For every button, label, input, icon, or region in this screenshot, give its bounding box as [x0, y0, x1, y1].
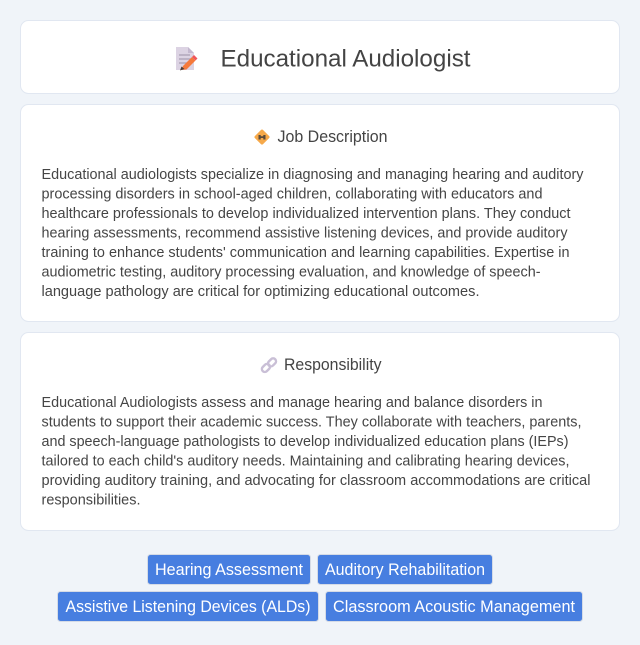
text block: responsibility: Educational Audiologists assess and manage hearing and balance disorders in [42, 395, 542, 411]
tag: assistive listening devices [58, 592, 318, 622]
heading: job description: Job Description [278, 128, 388, 146]
text block: responsibility: and speech-language pathologists to develop individualized education plans (IEPs) [42, 434, 568, 450]
tag: classroom acoustic management [326, 592, 582, 622]
text block: responsibility: providing auditory training, and advocating for classroom accommodations are critical [42, 473, 590, 489]
text block: responsibility [42, 395, 590, 508]
tag: classroom acoustic management: Classroom Acoustic Management [333, 598, 575, 616]
text block: job description: Educational audiologists specialize in diagnosing and managing hearing and auditory [42, 167, 584, 183]
panel: responsibility [20, 332, 620, 530]
title text: Educational Audiologist [220, 46, 471, 72]
icon: orange diamond [254, 129, 270, 145]
heading: responsibility: Responsibility [284, 356, 382, 374]
text block: job description [42, 167, 584, 300]
text block: responsibility: tailored to each child's auditory needs. Maintaining and calibrating hearing devices, [42, 454, 570, 470]
tag: hearing assessment [148, 554, 310, 584]
text block: job description: training to enhance students' communication and learning capabilities. Expertise in [42, 245, 570, 261]
panel: job description [20, 104, 620, 322]
tag: auditory rehabilitation [318, 554, 492, 584]
text block: job description: language pathology are critical for optimizing educational outcomes. [42, 284, 480, 300]
text block: responsibility: students to support their academic success. They collaborate with teachers, parents, [42, 414, 582, 430]
icon: link [261, 357, 277, 373]
text block: job description: processing disorders in school-aged children, collaborating with educators and [42, 186, 542, 202]
icon: memo with pencil [176, 47, 198, 70]
text block: job description: healthcare professionals to develop individualized intervention plans. They conduct [42, 206, 570, 222]
text block: job description: hearing assessments, recommend assistive listening devices, and provide auditory [42, 226, 568, 242]
panel: title [20, 20, 620, 94]
tag: auditory rehabilitation: Auditory Rehabilitation [325, 561, 485, 579]
text block: job description: audiometric testing, auditory processing evaluation, and knowledge of speech- [42, 264, 541, 280]
tag: hearing assessment: Hearing Assessment [155, 561, 303, 579]
tag: assistive listening devices: Assistive Listening Devices (ALDs) [66, 598, 310, 616]
text block: responsibility: responsibilities. [42, 492, 140, 508]
